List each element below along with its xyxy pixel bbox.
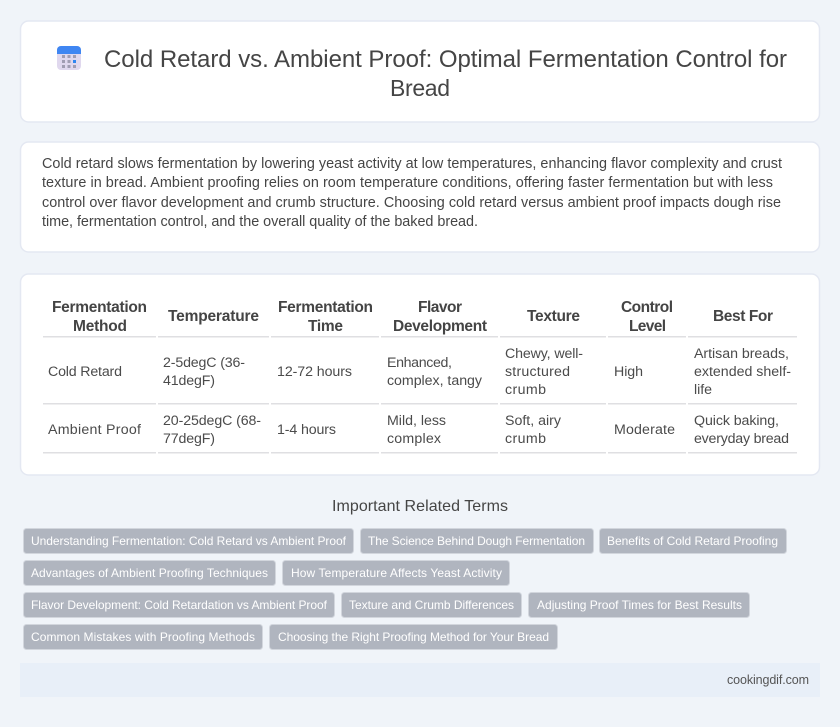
table header row: Flavor xyxy=(418,299,462,316)
panel: related term tags: How Temperature Affects Yeast Activity xyxy=(291,566,502,580)
panel: related term tags: Advantages of Ambient Proofing Techniques xyxy=(31,566,268,580)
table row: cold retard: complex, tangy xyxy=(387,373,483,389)
table row: ambient proof: Moderate xyxy=(614,422,675,438)
panel: introduction xyxy=(20,142,820,252)
table row: ambient proof: Quick baking, xyxy=(694,413,779,429)
table row: cold retard: Chewy, well- xyxy=(505,346,583,362)
footer xyxy=(20,663,820,697)
panel: related term tags: Benefits of Cold Retard Proofing xyxy=(607,534,778,548)
text block: introduction paragraph: control over flavor development and crumb structure. Choosing cold retard versus ambient proof impacts dough rise xyxy=(42,195,781,211)
table row: cold retard: Enhanced, xyxy=(387,355,452,371)
table row: ambient proof: Mild, less xyxy=(387,413,446,429)
panel: related term tags: Choosing the Right Proofing Method for Your Bread xyxy=(278,630,549,644)
panel: related term tags: Flavor Development: Cold Retardation vs Ambient Proof xyxy=(31,598,328,612)
title xyxy=(104,46,787,101)
text block: introduction paragraph: time, fermentation control, and the overall quality of the baked bread. xyxy=(42,214,478,230)
panel: comparison table xyxy=(20,274,820,475)
table header row xyxy=(52,299,773,335)
text block: introduction paragraph xyxy=(42,156,782,230)
table header row: Best For xyxy=(713,308,773,325)
panel: related term tags: Adjusting Proof Times for Best Results xyxy=(537,598,742,612)
title: Cold Retard vs. Ambient Proof: Optimal Fermentation Control for xyxy=(104,46,787,73)
table header row: Level xyxy=(629,318,666,335)
table row: cold retard: Cold Retard xyxy=(48,364,122,380)
table row: ambient proof: 77degF) xyxy=(163,431,215,447)
panel: title header xyxy=(20,21,820,122)
table row: cold retard: extended shelf- xyxy=(694,364,791,380)
table row: cold retard: Artisan breads, xyxy=(694,346,789,362)
table row: ambient proof: complex xyxy=(387,431,441,447)
table row: ambient proof: Ambient Proof xyxy=(48,422,141,438)
table header row: Fermentation xyxy=(278,299,373,316)
text block: introduction paragraph: texture in bread. Ambient proofing relies on room temperature conditions, offering faster fermentation but with less xyxy=(42,175,773,191)
table row: cold retard: 12-72 hours xyxy=(277,364,352,380)
table header row: Development xyxy=(393,318,487,335)
text block: introduction paragraph: Cold retard slows fermentation by lowering yeast activity at low temperatures, enhancing flavor complexity and crust xyxy=(42,156,782,172)
table row: cold retard: structured xyxy=(505,364,570,380)
panel: related term tags: The Science Behind Dough Fermentation xyxy=(368,534,585,548)
table row: cold retard: High xyxy=(614,364,643,380)
table row: ambient proof: 20-25degC (68- xyxy=(163,413,261,429)
panel: related term tags xyxy=(24,528,786,650)
table header row: Control xyxy=(621,299,673,316)
table row: cold retard: crumb xyxy=(505,382,546,398)
table row: ambient proof: everyday bread xyxy=(694,431,789,447)
table header row: Texture xyxy=(527,308,580,325)
table header row: Fermentation xyxy=(52,299,147,316)
table header row: Method xyxy=(73,318,127,335)
table row: cold retard xyxy=(48,346,791,398)
table header row: Time xyxy=(308,318,343,335)
table row: ambient proof: 1-4 hours xyxy=(277,422,336,438)
panel: related term tags: Understanding Fermentation: Cold Retard vs Ambient Proof xyxy=(31,534,347,548)
table row: cold retard: 41degF) xyxy=(163,373,215,389)
heading: important related terms: Important Related Terms xyxy=(332,498,508,515)
table row: cold retard: life xyxy=(694,382,712,398)
table row: cold retard: 2-5degC (36- xyxy=(163,355,245,371)
table row: ambient proof: crumb xyxy=(505,431,546,447)
title: Bread xyxy=(390,75,450,101)
icon: calendar xyxy=(57,46,81,70)
panel: related term tags: Texture and Crumb Differences xyxy=(349,598,514,612)
table header row: Temperature xyxy=(168,308,259,325)
panel: related term tags: Common Mistakes with Proofing Methods xyxy=(31,630,255,644)
footer: cookingdif.com xyxy=(727,673,809,687)
table row: ambient proof: Soft, airy xyxy=(505,413,562,429)
table row: ambient proof xyxy=(48,413,789,447)
